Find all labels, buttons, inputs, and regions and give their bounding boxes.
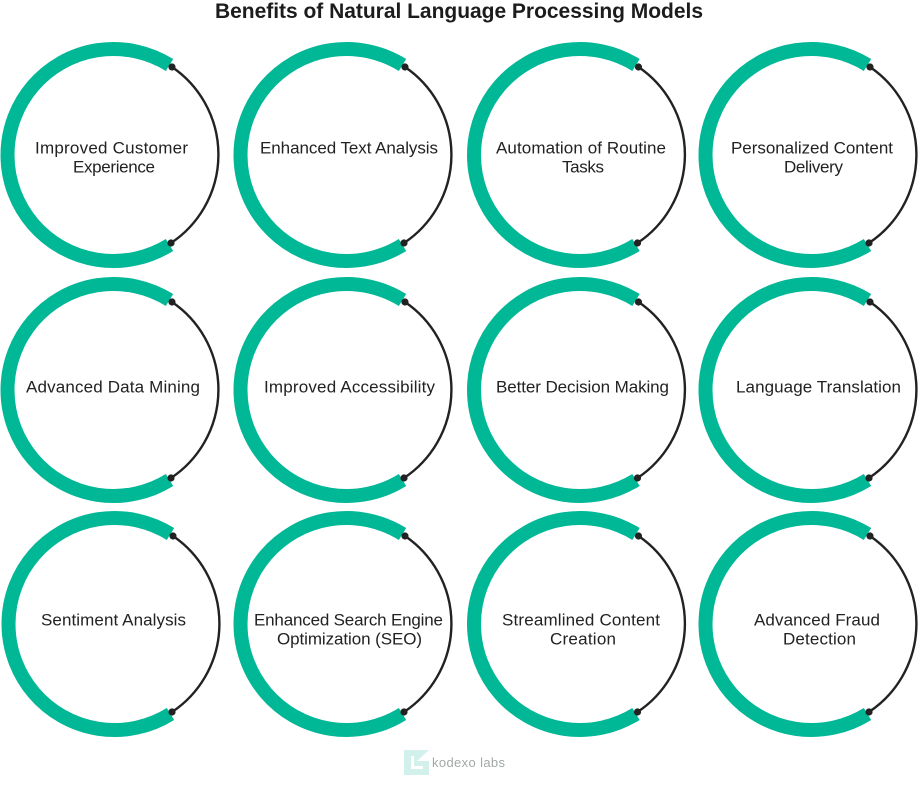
- panel: Streamlined Content Creation: [474, 518, 685, 730]
- panel: Improved Customer Experience: Improved Customer: [35, 138, 188, 158]
- panel: Enhanced Search Engine Optimization (SEO): [241, 518, 451, 730]
- panel: Sentiment Analysis: [9, 518, 219, 730]
- panel: Automation of Routine Tasks: Tasks: [562, 158, 604, 176]
- panel: Better Decision Making: [474, 284, 685, 496]
- panel: Automation of Routine Tasks: [474, 49, 685, 261]
- panel: Improved Accessibility: [241, 284, 451, 496]
- panel: Advanced Fraud Detection: Advanced Fraud: [754, 610, 880, 630]
- panel: Streamlined Content Creation: Creation: [550, 630, 616, 648]
- panel: Personalized Content Delivery: [706, 49, 916, 261]
- panel: Personalized Content Delivery: Personalized Content: [731, 138, 893, 158]
- panel: Advanced Data Mining: [8, 284, 218, 496]
- logo wordmark: kodexo labs: [432, 755, 506, 770]
- panel: Personalized Content Delivery: Delivery: [784, 158, 844, 176]
- title: Benefits of Natural Language Processing Models: [215, 0, 703, 23]
- panel: Enhanced Text Analysis: [241, 49, 451, 261]
- panel: Enhanced Search Engine Optimization (SEO): Optimization (SEO): [277, 630, 422, 648]
- panel: Advanced Data Mining: Advanced Data Mining: [26, 378, 200, 396]
- panel: Better Decision Making: Better Decision Making: [496, 378, 669, 396]
- panel: Streamlined Content Creation: Streamlined Content: [502, 610, 660, 630]
- panel: Advanced Fraud Detection: Detection: [783, 630, 856, 648]
- panel: Enhanced Search Engine Optimization (SEO): Enhanced Search Engine: [254, 610, 443, 630]
- panel: Enhanced Text Analysis: Enhanced Text Analysis: [260, 138, 438, 158]
- panel: Improved Customer Experience: [8, 49, 218, 261]
- panel: Improved Accessibility: Improved Accessibility: [264, 378, 436, 396]
- panel: Advanced Fraud Detection: [706, 518, 916, 730]
- panel: Sentiment Analysis: Sentiment Analysis: [41, 610, 186, 630]
- logo: kodexo labs: [404, 750, 506, 775]
- panel: Language Translation: Language Translation: [736, 378, 901, 396]
- panel: Improved Customer Experience: Experience: [73, 158, 155, 176]
- panel: Automation of Routine Tasks: Automation of Routine: [496, 138, 666, 158]
- icon: kodexo logo mark: [404, 750, 429, 775]
- panel: Language Translation: [706, 284, 916, 496]
